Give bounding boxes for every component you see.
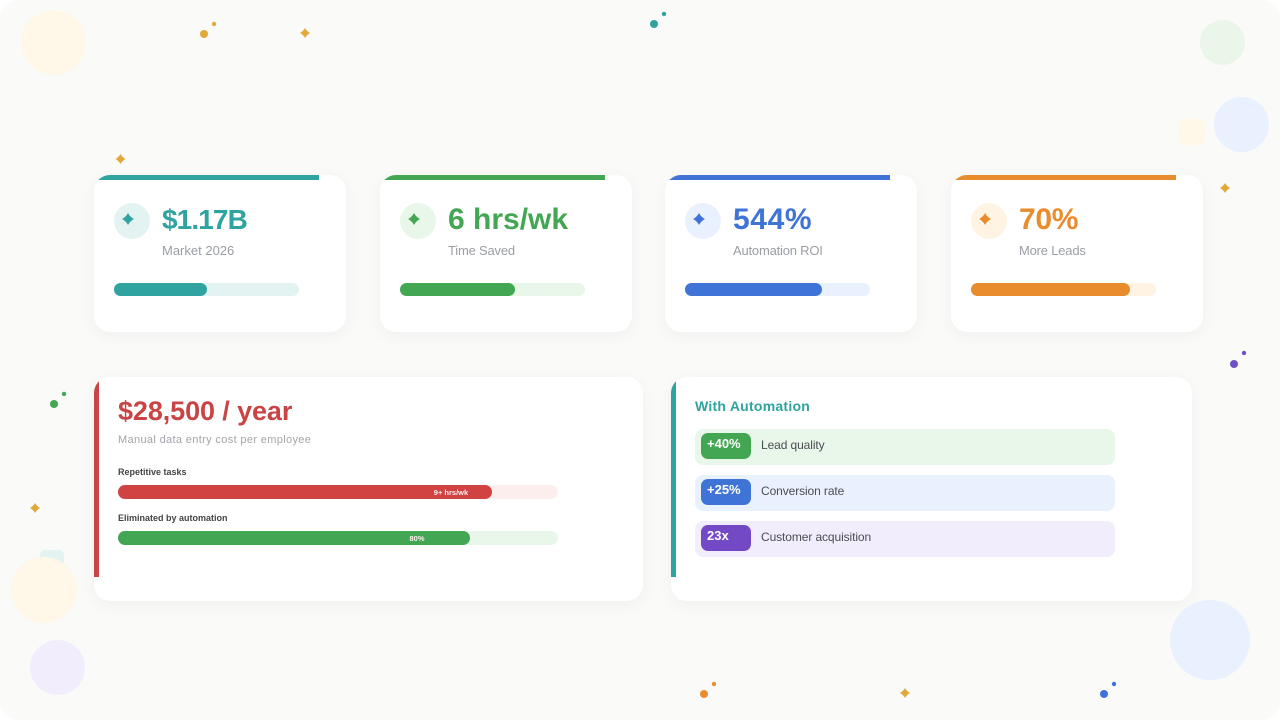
- bar fill: [118, 531, 470, 545]
- heading: With Automation: [695, 398, 810, 414]
- bar: eliminated: [118, 531, 558, 545]
- value: 70%: [1019, 203, 1078, 236]
- bar fill: [118, 485, 492, 499]
- label: Time Saved: [448, 243, 515, 258]
- decorative cream square right: [1179, 119, 1205, 145]
- row: conversion rate: [695, 475, 1115, 511]
- label: Market 2026: [162, 243, 234, 258]
- card: time saved: [380, 175, 632, 332]
- bar fill: 9+ hrs/wk: [434, 488, 468, 497]
- value: $1.17B: [162, 204, 247, 235]
- subheading: Manual data entry cost per employee: [118, 434, 311, 446]
- accent bar: [380, 175, 605, 180]
- icon: sparkle: [400, 203, 436, 239]
- accent side bar: [94, 377, 99, 577]
- panel: with automation: [671, 377, 1192, 601]
- decorative lilac circle bottom left: [30, 640, 85, 695]
- progress bar: [400, 283, 585, 296]
- label: repetitive tasks: Repetitive tasks: [118, 467, 187, 477]
- accent side bar: [671, 377, 676, 577]
- icon: sparkle: [971, 203, 1007, 239]
- badge: +40%: [707, 436, 741, 451]
- value: 544%: [733, 203, 812, 236]
- decorative teal square: [40, 550, 64, 574]
- decorative green circle top right: [1200, 20, 1245, 65]
- progress bar: [114, 283, 299, 296]
- badge: 23x: [707, 528, 729, 543]
- card: market: [94, 175, 346, 332]
- heading: $28,500 / year: [118, 396, 292, 426]
- value: 6 hrs/wk: [448, 203, 568, 236]
- icon: sparkle: [685, 203, 721, 239]
- label: Automation ROI: [733, 243, 823, 258]
- badge: [701, 433, 751, 459]
- decorative cream circle bottom left: [11, 557, 77, 623]
- row: lead quality: [695, 429, 1115, 465]
- decorative blue circle right: [1214, 97, 1269, 152]
- accent bar: [951, 175, 1176, 180]
- progress bar: [971, 283, 1156, 296]
- progress bar: [685, 283, 870, 296]
- row label: Lead quality: [761, 438, 825, 452]
- label: More Leads: [1019, 243, 1086, 258]
- badge: +25%: [707, 482, 741, 497]
- accent bar: [665, 175, 890, 180]
- row: customer acquisition: [695, 521, 1115, 557]
- decorative cream circle top left: [21, 10, 86, 75]
- row label: Customer acquisition: [761, 530, 871, 544]
- icon: sparkle: [114, 203, 150, 239]
- badge: [701, 525, 751, 551]
- decorative blue circle bottom right: [1170, 600, 1250, 680]
- badge: [701, 479, 751, 505]
- row label: Conversion rate: [761, 484, 844, 498]
- bar: repetitive tasks: [118, 485, 558, 499]
- bar fill: 80%: [409, 534, 425, 543]
- card: leads: [951, 175, 1203, 332]
- accent bar: [94, 175, 319, 180]
- label: eliminated by automation: Eliminated by automation: [118, 513, 228, 523]
- card: ROI: [665, 175, 917, 332]
- panel: manual cost: [94, 377, 643, 601]
